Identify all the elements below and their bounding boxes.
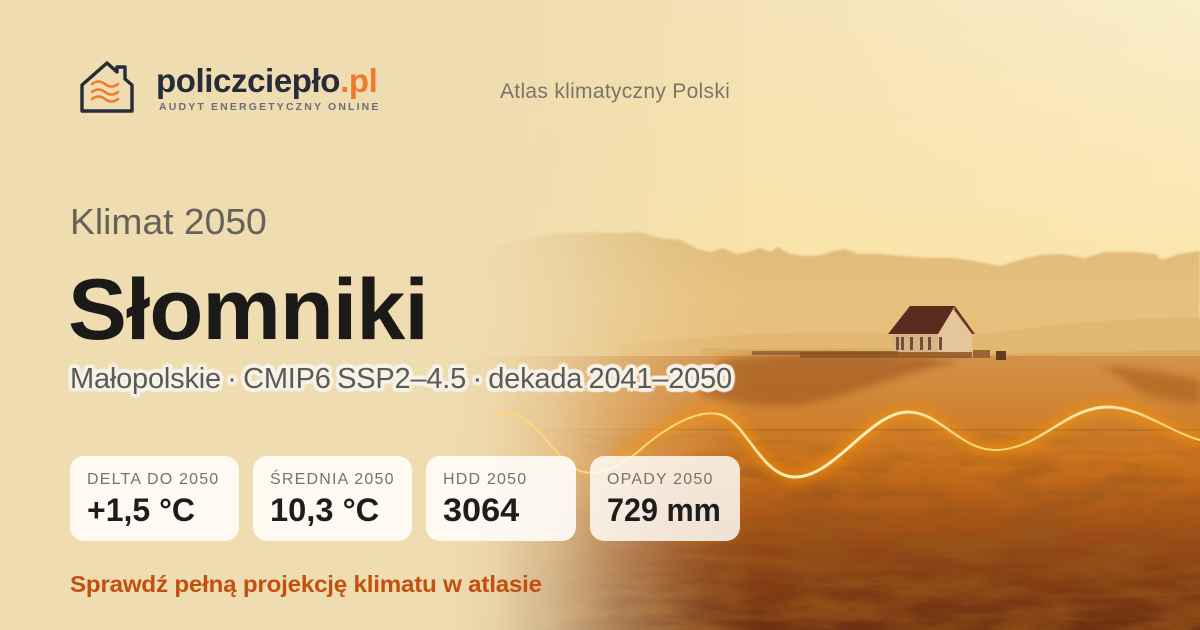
- logo tagline: AUDYT ENERGETYCZNY ONLINE: [159, 101, 381, 113]
- house: [752, 306, 1006, 360]
- city title: Słomniki: [68, 262, 428, 358]
- eyebrow heading: Klimat 2050: [70, 201, 267, 242]
- logo wordmark: policzciepło.pl: [156, 62, 377, 99]
- stat card: HDD: HDD 2050: [443, 471, 527, 488]
- stat card: average: [253, 456, 412, 541]
- background scene: field at sunset with house: [489, 0, 1200, 630]
- dark grass patches: [584, 448, 1200, 630]
- stat card: delta: [70, 456, 239, 541]
- stat card: average: ŚREDNIA 2050: [270, 471, 395, 488]
- hill shadow: [700, 353, 960, 406]
- stat card: HDD: 3064: [443, 492, 519, 528]
- glowing wave line: [497, 407, 1200, 477]
- icon: house with heat waves: [80, 61, 134, 113]
- stat card: average: 10,3 °C: [270, 492, 379, 528]
- call to action: Sprawdź pełną projekcję klimatu w atlasie: [70, 571, 542, 597]
- stat card: rainfall: 729 mm: [607, 492, 721, 528]
- field texture: [540, 430, 1200, 630]
- stat card: delta: +1,5 °C: [87, 492, 195, 528]
- stat card: delta: DELTA DO 2050: [87, 471, 219, 488]
- stat card: rainfall: OPADY 2050: [607, 471, 714, 488]
- tree line: [470, 232, 1200, 362]
- logo: [80, 61, 381, 113]
- atlas label: Atlas klimatyczny Polski: [500, 80, 730, 103]
- stat card: HDD: [426, 456, 576, 541]
- distant hills: [620, 318, 1200, 370]
- stat card: rainfall: [590, 456, 740, 541]
- field: [0, 356, 1200, 630]
- subtitle: Małopolskie · CMIP6 SSP2–4.5 · dekada 2041–2050: [70, 363, 732, 395]
